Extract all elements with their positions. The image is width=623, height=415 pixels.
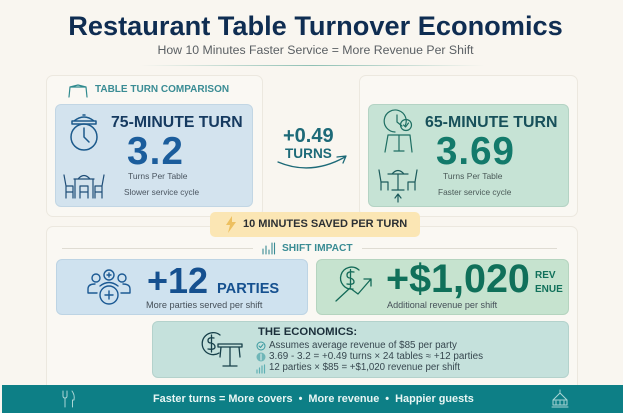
value label: turns: TURNS: [285, 146, 332, 161]
card: the economics: [152, 321, 569, 378]
number: 3.2: 3.2: [127, 130, 184, 172]
badge: 10 minutes saved per turn: [210, 212, 420, 237]
value: +$1,020: +$1,020: [386, 257, 530, 301]
section heading: table turn comparison: TABLE TURN COMPARISON: [95, 84, 229, 95]
panel: right comparison: [359, 75, 578, 217]
card: +$1,020 revenue: [316, 259, 569, 315]
badge text: 10 MINUTES SAVED PER TURN: [243, 218, 407, 230]
value label: revenue: ENUE: [535, 284, 563, 295]
icon: bar chart: [262, 242, 276, 254]
economics line 2: 3.69 - 3.2 = +0.49 turns × 24 tables ≈ +12 parties: [269, 351, 483, 362]
icon: group of people with plus: [87, 269, 131, 305]
label: turns per table: Turns Per Table: [128, 171, 188, 181]
number: 3.69: 3.69: [436, 130, 515, 172]
panel: table turn comparison: [46, 75, 263, 217]
bottom strip: [0, 413, 623, 415]
icon: restaurant building: [552, 390, 568, 408]
callout: +0.49 turns: [277, 125, 347, 169]
value: +0.49: +0.49: [283, 125, 334, 147]
subtitle: How 10 Minutes Faster Service = More Revenue Per Shift: [157, 43, 474, 57]
icon: check circle: [256, 342, 266, 350]
label: faster service cycle: Faster service cycle: [438, 187, 511, 197]
icon: fork and knife: [62, 390, 75, 408]
label: slower service cycle: Slower service cycle: [124, 187, 199, 197]
icon: small bars: [256, 364, 266, 374]
section heading: shift impact: SHIFT IMPACT: [282, 243, 353, 254]
heading: the economics: THE ECONOMICS:: [258, 326, 357, 338]
panel: shift impact: [46, 226, 578, 396]
heading: 65-minute turn: 65-MINUTE TURN: [425, 114, 557, 130]
card: +12 parties: [56, 259, 308, 315]
footer text: Faster turns = More covers • More revenue • Happier guests: [153, 392, 474, 404]
icon: clock with tray: [70, 114, 98, 151]
title divider: [140, 65, 485, 66]
value: +12: +12: [147, 260, 208, 300]
footer banner: [2, 385, 623, 413]
icon: lightning bolt: [226, 216, 236, 233]
icon: clock and table: [384, 109, 413, 153]
label: more parties served per shift: More parties served per shift: [146, 300, 262, 310]
icon: dollar with rising arrow: [335, 266, 372, 302]
icon: coin: [256, 352, 266, 362]
card: 75-minute turn: [55, 104, 253, 207]
arrow: turn gain: [277, 155, 347, 169]
value label: revenue: REV: [535, 270, 556, 281]
icon: dollar and table: [202, 332, 243, 367]
heading: 75-minute turn: 75-MINUTE TURN: [111, 114, 243, 130]
economics line 3: 12 parties × $85 = +$1,020 revenue per shift: [269, 362, 460, 373]
label: turns per table: Turns Per Table: [443, 171, 503, 181]
label: additional revenue per shift: Additional revenue per shift: [387, 300, 497, 310]
icon: dining table and chairs: [63, 174, 105, 199]
card: 65-minute turn: [368, 104, 569, 207]
economics line 1: Assumes average revenue of $85 per party: [269, 340, 457, 351]
value label: revenue: [535, 270, 563, 295]
section divider lines: [62, 248, 253, 249]
icon: table header: [68, 84, 88, 98]
title: Restaurant Table Turnover Economics: [68, 10, 563, 41]
icon: bistro table with up arrow: [378, 169, 418, 203]
value label: parties: PARTIES: [217, 280, 279, 296]
